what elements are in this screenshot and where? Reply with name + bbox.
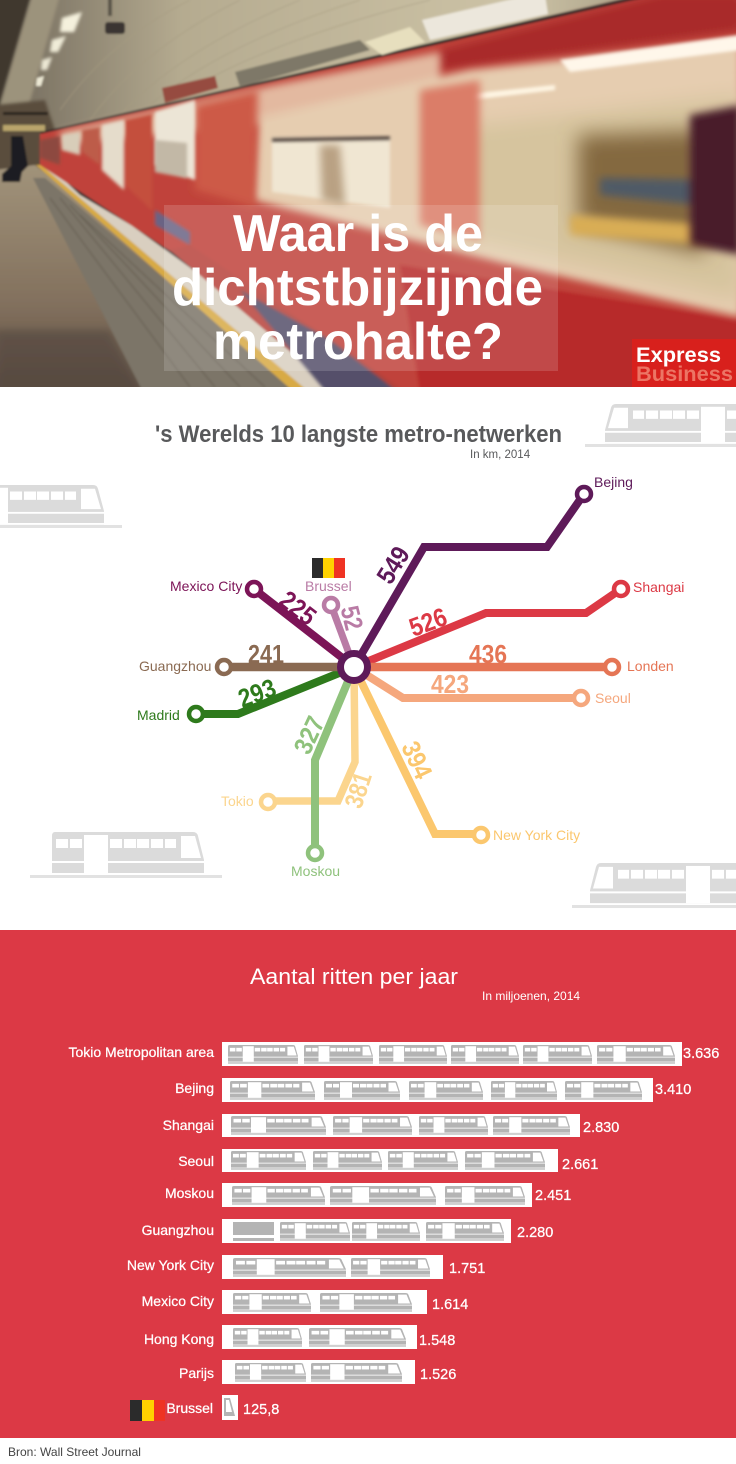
line: Bejing	[354, 474, 633, 667]
line: Tokio	[221, 667, 378, 812]
line: Tokio: 381	[338, 768, 378, 812]
bar: Parijs	[179, 1360, 456, 1384]
line: Bejing: Bejing	[594, 474, 633, 490]
bar: Parijs: 1.526	[420, 1367, 456, 1383]
bar: Moskou: 2.451	[535, 1188, 571, 1204]
decorative train: left	[0, 485, 122, 528]
central hub	[340, 654, 368, 680]
bar: Shangai: Shangai	[163, 1117, 214, 1133]
bar: Guangzhou: Guangzhou	[142, 1222, 214, 1238]
line: Moskou: Moskou	[291, 863, 340, 879]
panel: metro network map	[0, 404, 736, 908]
header photo: metro train in motion	[0, 0, 736, 392]
bar: Guangzhou: 2.280	[517, 1225, 553, 1241]
bar: Shangai	[163, 1114, 619, 1137]
blurred window band	[253, 40, 736, 317]
line: Londen: 436	[469, 639, 507, 669]
line: Moskou	[287, 667, 354, 879]
line: Madrid: 293	[234, 672, 280, 714]
line: Guangzhou	[139, 639, 354, 674]
line: Guangzhou: 241	[248, 639, 284, 669]
title: dichtstbijzijnde	[172, 259, 543, 317]
bar: Tokio	[68, 1042, 719, 1066]
bar: New York City: 1.751	[449, 1261, 485, 1277]
source: Bron: Wall Street Journal	[8, 1445, 141, 1459]
line: Brussel: 52	[335, 603, 369, 633]
bar: Mexico City: Mexico City	[142, 1293, 214, 1309]
title: Waar is de	[233, 205, 483, 263]
carriages to the vanishing point	[155, 100, 195, 180]
line: Shangai	[354, 579, 684, 667]
chart subheading: In miljoenen, 2014	[482, 989, 580, 1003]
bar: Bejing: Bejing	[175, 1080, 214, 1096]
title panel	[164, 205, 558, 371]
decorative train: top right	[585, 404, 736, 447]
bar: Hong Kong: Hong Kong	[144, 1331, 214, 1347]
bar: Guangzhou	[142, 1219, 553, 1243]
bar: Bejing: 3.410	[655, 1082, 691, 1098]
wall band	[40, 0, 660, 142]
line: Madrid: Madrid	[137, 707, 180, 723]
panel: rides per year	[0, 930, 736, 1438]
bar: Shangai: 2.830	[583, 1120, 619, 1136]
line: Moskou: 327	[287, 711, 331, 759]
bar: Mexico City: 1.614	[432, 1297, 468, 1313]
bar: Moskou: Moskou	[165, 1185, 214, 1201]
line: New York City: 394	[395, 736, 439, 784]
pale upper band of the near carriages	[60, 52, 440, 145]
line: Bejing: 549	[370, 541, 416, 589]
line: Brussel	[305, 578, 369, 667]
line: Londen: Londen	[627, 658, 674, 674]
bar: Hong Kong: 1.548	[419, 1333, 455, 1349]
bar: Brussel: 125,8	[243, 1402, 279, 1418]
doors	[420, 80, 480, 240]
bar: New York City: New York City	[127, 1257, 214, 1273]
decorative train: bottom left	[30, 832, 222, 878]
logo: Express Business	[632, 339, 736, 387]
line: Guangzhou: Guangzhou	[139, 658, 211, 674]
bar: Parijs: Parijs	[179, 1365, 214, 1381]
platform	[0, 164, 192, 387]
bar: Seoul: Seoul	[178, 1153, 214, 1169]
logo: Express Business: Express	[636, 344, 721, 367]
decorative train: bottom right	[572, 863, 736, 908]
line: Mexico City	[170, 578, 354, 667]
chart heading: Aantal ritten per jaar	[250, 964, 458, 989]
bar: Seoul: 2.661	[562, 1157, 598, 1173]
line: Tokio: Tokio	[221, 793, 254, 809]
bar: New York City	[127, 1255, 485, 1279]
train body	[40, 0, 736, 392]
line: Seoul: 423	[431, 669, 469, 699]
bar: Hong Kong	[144, 1325, 455, 1349]
line: New York City	[354, 667, 580, 843]
line: Londen	[354, 639, 674, 674]
bar: Tokio: 3.636	[683, 1046, 719, 1062]
bar: Moskou	[165, 1183, 571, 1207]
bar: Bejing	[175, 1078, 691, 1102]
bar: Mexico City	[142, 1290, 468, 1314]
line: Brussel: Brussel	[305, 578, 352, 594]
line: Seoul	[354, 667, 631, 706]
title: metrohalte?	[213, 313, 503, 371]
line: Shangai: 526	[405, 601, 451, 643]
line: Shangai: Shangai	[633, 579, 684, 595]
line: Seoul: Seoul	[595, 690, 631, 706]
line: Mexico City: 225	[274, 584, 322, 632]
line: New York City: New York City	[493, 827, 580, 843]
bar: Brussel: Brussel	[166, 1400, 213, 1416]
people on platform	[2, 136, 28, 182]
map heading: 's Werelds 10 langste metro-netwerken	[155, 421, 562, 448]
bar: Brussel	[130, 1395, 279, 1421]
bar: Seoul	[178, 1149, 598, 1173]
logo: Express Business: Business	[636, 363, 733, 386]
line: Madrid	[137, 667, 354, 723]
Belgian flag	[312, 558, 345, 578]
line: Mexico City: Mexico City	[170, 578, 242, 594]
bar: Tokio: Tokio Metropolitan area	[68, 1044, 214, 1060]
map subheading: In km, 2014	[470, 449, 531, 461]
title	[172, 205, 543, 371]
